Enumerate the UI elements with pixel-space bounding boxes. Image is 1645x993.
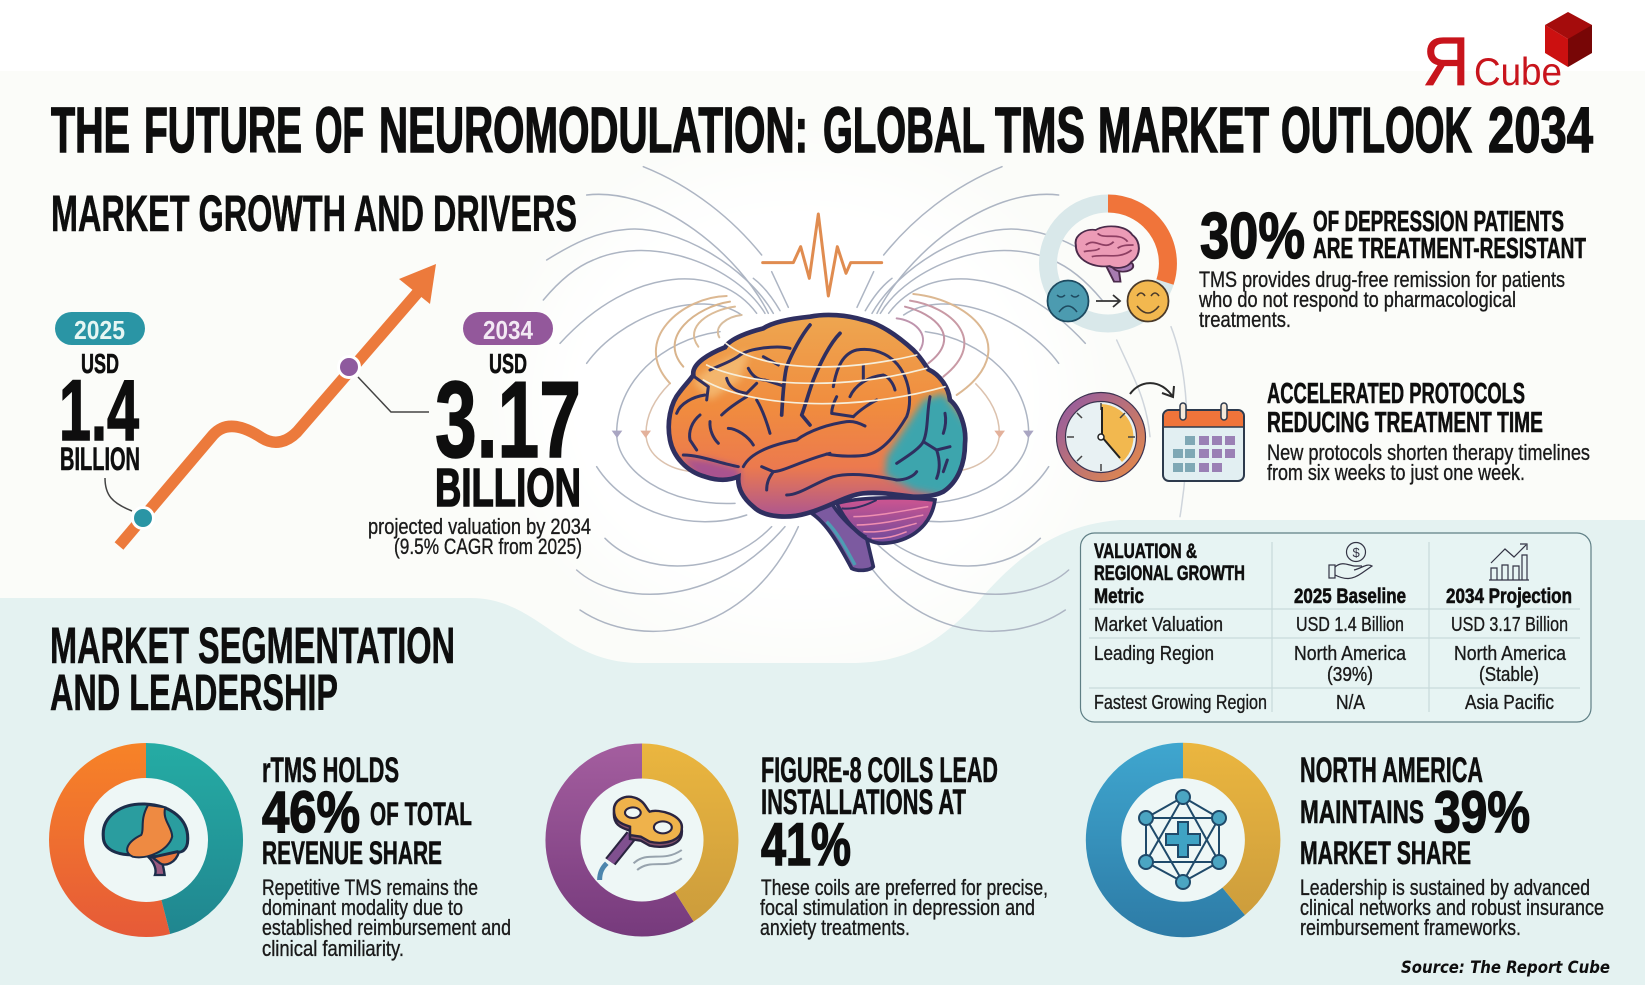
row: market valuation: USD 3.17 Billion — [1451, 613, 1568, 636]
body text: who do not respond to pharmacological — [1198, 287, 1516, 312]
stat: 2034 valuation: 2034 — [483, 315, 533, 345]
maintains: MAINTAINS — [1300, 794, 1424, 830]
heading lines: FIGURE-8 COILS LEAD — [761, 751, 998, 790]
title: NEUROMODULATION: — [379, 94, 808, 166]
outer field arcs, right — [1117, 327, 1187, 517]
growth arrow chart — [105, 264, 436, 546]
stat: 2034 valuation — [368, 312, 591, 559]
heading: market segmentation and leadership: AND LEADERSHIP — [50, 664, 338, 721]
central illustration: brain with magnetic field — [543, 167, 1187, 631]
icon: clock — [1056, 392, 1146, 482]
field and pulse layer — [543, 167, 1187, 631]
revenue share: REVENUE SHARE — [262, 835, 442, 871]
table title — [1094, 540, 1245, 585]
stat: 30 percent: 30% — [1200, 199, 1305, 272]
logo cube — [1545, 12, 1592, 67]
row: leading region: North America — [1454, 642, 1567, 665]
body text: established reimbursement and — [262, 915, 511, 940]
magnetic field lines, left — [543, 167, 798, 631]
row: leading region: North America — [1294, 642, 1407, 665]
body text: clinical familiarity. — [262, 936, 404, 961]
title: MARKET — [1098, 94, 1269, 166]
body text: from six weeks to just one week. — [1267, 460, 1525, 485]
icon: hand with dollar: $ — [1352, 545, 1360, 560]
row: leading region: (Stable) — [1479, 663, 1539, 686]
heading lines: rTMS HOLDS — [262, 751, 399, 790]
heading: market segmentation and leadership: MARKET SEGMENTATION — [50, 617, 455, 674]
body text — [262, 875, 511, 961]
row: market valuation: USD 1.4 Billion — [1296, 613, 1404, 636]
body text: TMS provides drug-free remission for patients — [1199, 267, 1565, 292]
panel: market growth — [51, 185, 591, 559]
title: 2034 — [1488, 94, 1593, 166]
icon: happy face — [1128, 280, 1168, 322]
title: TMS — [995, 94, 1085, 166]
row: leading region — [1094, 642, 1567, 686]
row: fastest growing region — [1094, 691, 1554, 714]
row: fastest growing region: Asia Pacific — [1465, 691, 1554, 714]
brainstem — [812, 503, 873, 570]
row: fastest growing region: Fastest Growing Region — [1094, 691, 1267, 714]
magnetic field lines, right — [847, 167, 1102, 631]
column headers: Metric — [1094, 585, 1144, 608]
donut: 41 percent — [563, 761, 721, 919]
source note: Source: The Report Cube — [1401, 958, 1610, 978]
of total: OF TOTAL — [370, 796, 472, 832]
icon: curved arrow — [1130, 383, 1174, 397]
title: OF — [315, 94, 364, 166]
segmentation background band — [0, 520, 1645, 985]
donut: 46 percent — [67, 760, 226, 920]
table: valuation and regional growth — [1080, 533, 1591, 722]
body text: These coils are preferred for precise, — [761, 875, 1048, 900]
stat: 2025 valuation — [55, 312, 145, 477]
marker 2034 — [337, 355, 361, 379]
icon: growth chart — [1489, 544, 1529, 580]
title — [51, 94, 1593, 166]
heading: market growth and drivers: MARKET GROWTH AND DRIVERS — [51, 185, 577, 242]
panel: North America — [1104, 751, 1604, 940]
heading: market segmentation and leadership — [50, 617, 455, 721]
stat: 2025 valuation: 2025 — [74, 315, 125, 345]
row: fastest growing region: N/A — [1336, 691, 1365, 714]
2034 connector — [358, 377, 429, 412]
icon: calendar — [1163, 403, 1244, 481]
body text: treatments. — [1199, 307, 1291, 332]
row: market valuation — [1094, 613, 1568, 636]
marker 2025 — [131, 506, 155, 530]
cerebellum — [837, 498, 935, 543]
body text: reimbursement frameworks. — [1300, 915, 1521, 940]
brain — [669, 315, 970, 570]
icon: pink brain — [1076, 226, 1139, 282]
icon: clinical network — [1139, 790, 1226, 889]
body text: anxiety treatments. — [760, 915, 910, 940]
coloured pulse arcs — [656, 294, 988, 395]
stat: 2034 valuation: USD — [489, 348, 527, 379]
donut: 30 percent — [1048, 204, 1168, 324]
title: OUTLOOK — [1281, 94, 1472, 166]
stat: 2034 valuation: (9.5% CAGR from 2025) — [394, 534, 582, 559]
market share: MARKET SHARE — [1300, 835, 1471, 871]
column headers: 2025 Baseline — [1294, 585, 1406, 608]
table title: REGIONAL GROWTH — [1094, 562, 1245, 585]
stat: 2034 valuation: projected valuation by 2034 — [368, 514, 591, 539]
donut: 39 percent — [1104, 760, 1263, 920]
title: THE — [51, 94, 130, 166]
pulse waveform — [763, 214, 882, 296]
body text: dominant modality due to — [262, 895, 463, 920]
stat: 2025 valuation: 1.4 — [59, 363, 139, 459]
table title: VALUATION & — [1094, 540, 1197, 563]
row: leading region: (39%) — [1327, 663, 1373, 686]
icon: figure-8 coil — [600, 797, 682, 880]
stat: 2034 valuation: 3.17 — [435, 359, 581, 481]
icon: arrow — [1096, 295, 1120, 307]
installations: INSTALLATIONS AT — [761, 783, 966, 822]
stat: 2034 valuation: BILLION — [435, 458, 581, 518]
body text — [1267, 440, 1590, 485]
body text — [760, 875, 1048, 940]
stat: 39 percent: 39% — [1434, 780, 1530, 845]
heading lines: NORTH AMERICA — [1300, 751, 1483, 790]
icon: hand with dollar — [1329, 542, 1372, 579]
logo wordmark R: Я — [1423, 24, 1469, 100]
brain white halo — [530, 170, 1070, 630]
stimulation rings across brain — [703, 343, 945, 404]
2025 connector — [105, 478, 132, 511]
body text — [1300, 875, 1604, 940]
row: leading region: Leading Region — [1094, 642, 1214, 665]
body text — [1198, 267, 1565, 332]
stat: 2025 valuation: BILLION — [60, 441, 140, 477]
body text: Repetitive TMS remains the — [262, 875, 478, 900]
callout: treatment-resistant depression — [1048, 199, 1586, 332]
icon: two-tone brain — [103, 804, 188, 875]
callout: accelerated protocols — [1056, 378, 1590, 485]
row: market valuation: Market Valuation — [1094, 613, 1223, 636]
panel: rTMS share — [67, 751, 511, 961]
title: GLOBAL — [823, 94, 985, 166]
panel: figure-8 coils — [563, 751, 1048, 940]
column headers: 2034 Projection — [1446, 585, 1572, 608]
stat: 46 percent: 46% — [262, 780, 360, 845]
column headers — [1094, 585, 1572, 608]
cerebrum — [669, 315, 970, 517]
heading — [1267, 378, 1543, 439]
logo wordmark Cube: Cube — [1474, 51, 1562, 94]
company logo — [1423, 12, 1592, 100]
icon: sad face — [1048, 280, 1088, 322]
stat: 2025 valuation: USD — [81, 348, 119, 379]
title: FUTURE — [144, 94, 302, 166]
stat: 41 percent: 41% — [761, 811, 851, 878]
body text: focal stimulation in depression and — [760, 895, 1035, 920]
